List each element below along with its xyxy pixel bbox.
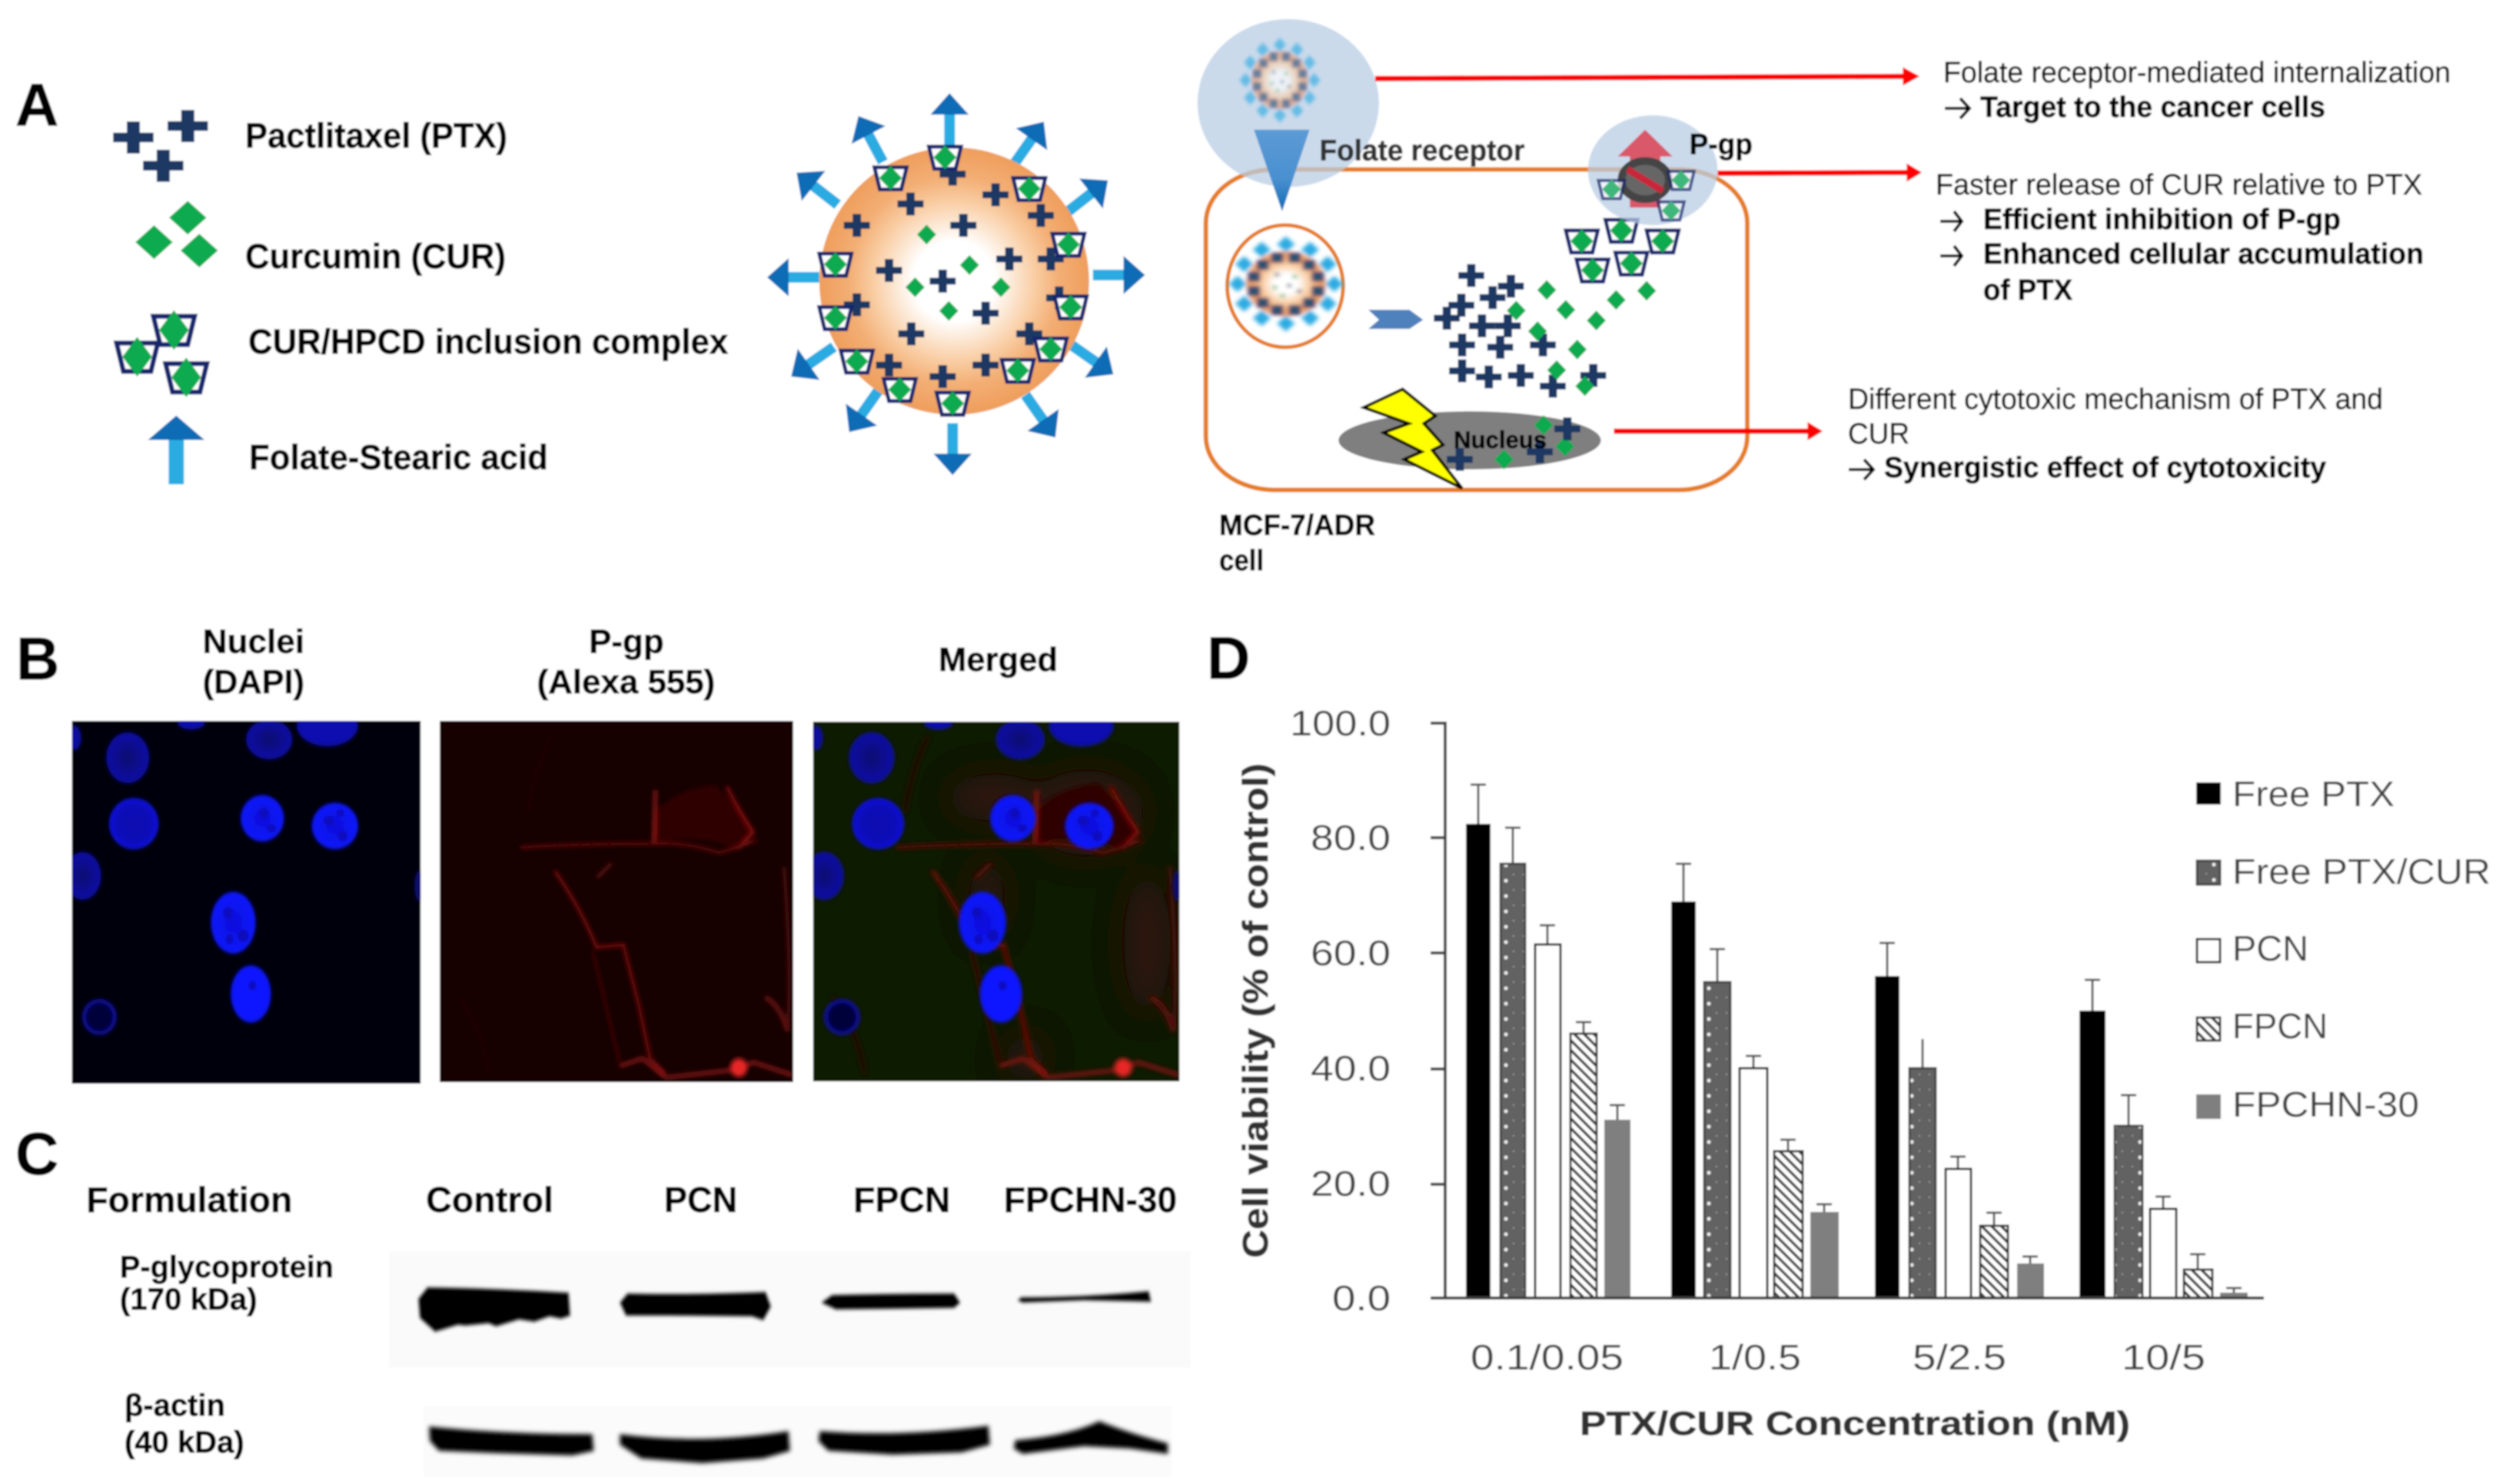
panel letter D: D: [1207, 624, 1250, 692]
blot column headings: Formulation: [86, 1180, 292, 1220]
legend label: folate-stearic acid: Folate-Stearic acid: [249, 437, 548, 476]
legend: Free PTX: [2232, 774, 2395, 814]
endosome with nanoparticle: [1227, 225, 1343, 347]
axes: [1431, 723, 2264, 1298]
image: P-gp stain: [440, 721, 793, 1082]
text: cytotoxic mechanism: Synergistic effect of cytotoxicity: [1884, 452, 2326, 484]
text: folate receptor mediated: [1943, 57, 2451, 124]
y axis tick labels: 100.0: [1290, 703, 1391, 743]
panel B: confocal images: [65, 622, 1182, 1084]
text: faster release of CUR: Efficient inhibition of P-gp: [1983, 204, 2341, 236]
red arrow: cytotoxic mechanism: [1614, 422, 1823, 440]
nucleus: Nucleus: [1454, 426, 1547, 453]
row label: beta-actin: (40 kDa): [125, 1426, 244, 1459]
legend: FPCN: [2232, 1006, 2328, 1046]
text: cytotoxic mechanism: CUR: [1848, 418, 1909, 450]
small nanoparticle approaching: [1239, 38, 1321, 123]
panel D: bar chart: [1235, 703, 2491, 1443]
text: cytotoxic mechanism: [1848, 383, 2383, 484]
blot column headings: Control: [426, 1180, 553, 1220]
y axis tick labels: 0.0: [1332, 1278, 1391, 1318]
internalization funnel arrow: [1254, 130, 1310, 211]
red arrow: folate internalization: [1375, 67, 1919, 85]
icon: folate-stearic acid arrow: [148, 416, 204, 484]
bars: FPCN: [1570, 1034, 2212, 1298]
heading: P-gp: [537, 622, 715, 701]
released PTX crosses: [1434, 264, 1606, 397]
error bars: [1471, 785, 2242, 1293]
heading: nuclei: (DAPI): [203, 663, 304, 701]
x axis tick labels: [1471, 1337, 2205, 1377]
heading: P-gp: P-gp: [589, 622, 664, 660]
text: faster release of CUR: Faster release of CUR relative to PTX: [1936, 169, 2422, 201]
label: cell line: [1219, 510, 1375, 577]
y axis tick labels: 80.0: [1311, 818, 1391, 858]
release chevron arrow: [1368, 310, 1423, 329]
x axis title: PTX/CUR Concentration (nM): [1580, 1405, 2130, 1443]
label: P-gp: P-gp: [1690, 128, 1753, 161]
text: folate receptor mediated: Target to the cancer cells: [1980, 91, 2325, 124]
text: faster release of CUR: of PTX: [1983, 274, 2073, 307]
blot: beta-actin bands: [424, 1406, 1172, 1477]
bars: Free PTX/CUR: [1501, 864, 2142, 1298]
cell outline: [1206, 169, 1747, 490]
label: cell line: cell: [1219, 545, 1264, 577]
panel letter B: B: [16, 625, 59, 692]
panel C: western blot: [86, 1180, 1191, 1477]
text: faster release of CUR: Enhanced cellular accumulation: [1983, 238, 2424, 271]
legend: PCN: [2232, 928, 2308, 968]
legend: [2196, 774, 2491, 1124]
image: DAPI nuclei: [65, 705, 424, 1084]
x axis tick labels: 0.1/0.05: [1471, 1337, 1624, 1377]
row label: P-glycoprotein: [120, 1250, 334, 1316]
row label: P-glycoprotein: P-glycoprotein: [120, 1250, 334, 1284]
icon: inclusion complexes: [117, 310, 207, 397]
image: merged stain: [805, 705, 1182, 1081]
blot column headings: FPCN: [853, 1180, 950, 1220]
panel letter C: C: [15, 1120, 58, 1187]
folate receptor circle: [1198, 19, 1379, 187]
icon: curcumin diamonds: [135, 201, 218, 267]
y axis tick labels: [1290, 703, 1391, 1318]
bars: FPCHN-30: [1604, 1120, 2248, 1298]
blot column headings: FPCHN-30: [1004, 1180, 1177, 1220]
panel A: legend and nanoparticle: [113, 93, 1145, 484]
label: cell line: MCF-7/ADR: [1219, 510, 1375, 542]
icon: lightning bolt: [1364, 389, 1462, 489]
legend label: paclitaxel: Pactlitaxel (PTX): [245, 116, 507, 155]
bars: PCN: [1535, 945, 2176, 1298]
bars: Free PTX: [1466, 824, 2106, 1298]
P-gp efflux pump: [1588, 115, 1717, 225]
row label: P-glycoprotein: (170 kDa): [120, 1283, 258, 1316]
heading: nuclei: Nuclei: [203, 622, 304, 660]
red arrow: faster release: [1717, 164, 1922, 181]
text: folate receptor mediated: Folate receptor-mediated internalization: [1943, 57, 2451, 89]
label: folate receptor: Folate receptor: [1319, 134, 1525, 167]
blot: P-glycoprotein bands: [389, 1251, 1191, 1368]
legend label: inclusion complex: CUR/HPCD inclusion complex: [248, 322, 729, 361]
text: faster release of CUR: [1936, 169, 2424, 307]
released CUR diamonds: [1507, 280, 1656, 396]
nanoparticle diagram: [767, 93, 1145, 475]
panel letter A: A: [15, 71, 58, 138]
row label: beta-actin: β-actin: [125, 1389, 225, 1423]
legend label: curcumin: Curcumin (CUR): [245, 237, 506, 276]
free inclusion complexes: [1566, 218, 1679, 282]
panel A: cell mechanism diagram: [1198, 19, 1922, 490]
heading: merged: Merged: [939, 641, 1058, 679]
x axis tick labels: 1/0.5: [1709, 1337, 1801, 1377]
icon: paclitaxel crosses: [113, 110, 208, 182]
legend: Free PTX/CUR: [2232, 852, 2491, 891]
blot column headings: [86, 1180, 1177, 1220]
y axis tick labels: 40.0: [1311, 1048, 1391, 1088]
row label: beta-actin: [125, 1389, 244, 1459]
y axis tick labels: 60.0: [1311, 933, 1391, 973]
text: cytotoxic mechanism: Different cytotoxic mechanism of PTX and: [1848, 383, 2383, 416]
blot column headings: PCN: [664, 1180, 737, 1220]
heading: P-gp: (Alexa 555): [537, 663, 715, 701]
y axis tick labels: 20.0: [1311, 1164, 1391, 1203]
heading: nuclei: [203, 622, 304, 701]
legend: FPCHN-30: [2232, 1084, 2419, 1124]
x axis tick labels: 5/2.5: [1913, 1337, 2006, 1377]
y axis title: Cell viability (% of control): [1235, 763, 1275, 1258]
nucleus: [1338, 411, 1601, 471]
x axis tick labels: 10/5: [2122, 1337, 2205, 1377]
